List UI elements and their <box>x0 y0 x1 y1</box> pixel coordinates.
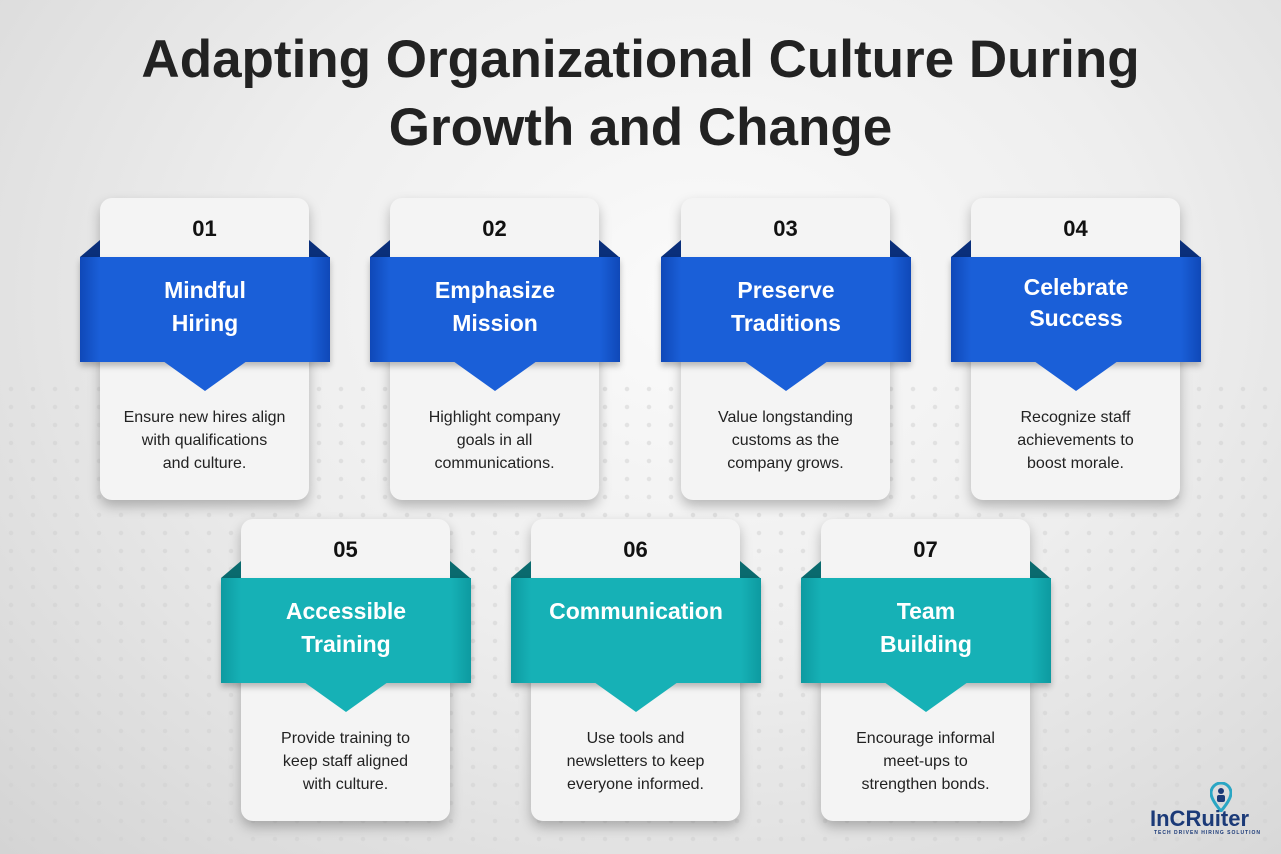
card 07 <box>798 518 1054 833</box>
card 01 <box>76 198 334 512</box>
card 07: Building <box>880 631 972 657</box>
card 03 <box>658 198 914 512</box>
card 04 <box>948 198 1204 512</box>
card 06: newsletters to keep <box>567 753 704 770</box>
card 05: with culture. <box>303 776 388 793</box>
card 07: Encourage informal <box>856 730 995 747</box>
card 03: customs as the <box>732 432 839 449</box>
card 05: Accessible <box>286 598 406 624</box>
card 05 <box>218 518 474 833</box>
card 01: Mindful <box>164 277 246 303</box>
card 07: meet-ups to <box>883 753 968 770</box>
card 02: goals in all <box>457 432 532 449</box>
card 02: Mission <box>452 310 538 336</box>
card 06: Communication <box>549 598 723 624</box>
card 01: Ensure new hires align <box>124 409 285 426</box>
logo <box>1150 782 1261 836</box>
card 04: Success <box>1029 305 1123 331</box>
card 04: achievements to <box>1017 432 1134 449</box>
card 01: 01 <box>192 216 217 241</box>
card 04: boost morale. <box>1027 455 1124 472</box>
card 07: strengthen bonds. <box>861 776 990 793</box>
card 07: 07 <box>913 537 938 562</box>
card 06: 06 <box>623 537 648 562</box>
card 05: 05 <box>333 537 358 562</box>
logo: TECH DRIVEN HIRING SOLUTION <box>1154 830 1261 836</box>
title <box>141 30 1140 157</box>
card 02: 02 <box>482 216 507 241</box>
card 01: Hiring <box>172 310 238 336</box>
card 02 <box>366 198 624 512</box>
card 02: Emphasize <box>435 277 555 303</box>
card 04: Celebrate <box>1024 274 1128 300</box>
card 03: 03 <box>773 216 798 241</box>
card 04: 04 <box>1063 216 1088 241</box>
card 03: company grows. <box>727 455 844 472</box>
logo: InCRuiter <box>1150 806 1249 831</box>
card 05: keep staff aligned <box>283 753 408 770</box>
icon: location pin <box>1210 782 1232 812</box>
card 06 <box>508 518 764 834</box>
card 03: Preserve <box>737 277 835 303</box>
card 05: Training <box>301 631 391 657</box>
card 05: Provide training to <box>281 730 410 747</box>
card 02: Highlight company <box>429 409 560 426</box>
card 06: everyone informed. <box>567 776 704 793</box>
card 07: Team <box>897 598 955 624</box>
card 03: Traditions <box>731 310 841 336</box>
card 01: with qualifications <box>142 432 267 449</box>
card 06: Use tools and <box>587 730 684 747</box>
title: Adapting Organizational Culture During <box>141 30 1140 89</box>
card 02: communications. <box>434 455 555 472</box>
title: Growth and Change <box>389 98 892 157</box>
card 04: Recognize staff <box>1020 409 1130 426</box>
card 01: and culture. <box>163 455 246 472</box>
card 03: Value longstanding <box>718 409 853 426</box>
